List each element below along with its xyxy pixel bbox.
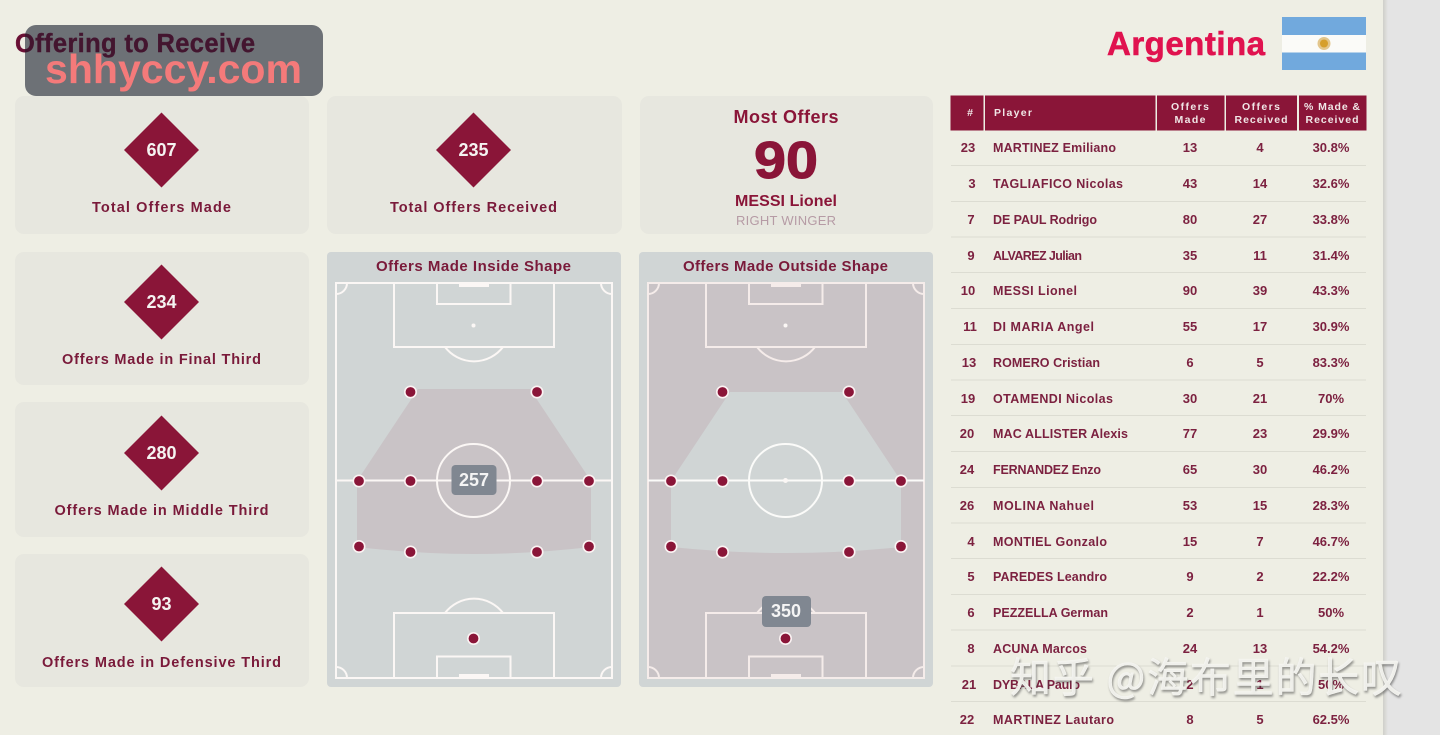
row: PEZZELLA German: 2 [1186, 605, 1194, 620]
panel: total offers received [327, 96, 622, 234]
icon: diamond 235 [436, 112, 511, 188]
heading: Offers Made Inside Shape [376, 258, 571, 275]
row: PAREDES Leandro: 5 [967, 569, 975, 584]
icon: diamond 93: 93 [151, 594, 172, 614]
row: MAC ALLISTER Alexis: MAC ALLISTER Alexis [993, 427, 1128, 441]
panel: most offers [640, 96, 933, 234]
row: PEZZELLA German: PEZZELLA German [993, 606, 1108, 620]
row: MESSI Lionel: MESSI Lionel [993, 284, 1077, 298]
label: Offers Made in Defensive Third [42, 655, 281, 671]
icon: diamond 234: 234 [146, 292, 177, 312]
row: PEZZELLA German: 6 [967, 605, 975, 620]
row: ROMERO Cristian: 83.3% [1313, 355, 1350, 370]
row: DYBALA Paulo: 21 [962, 677, 976, 692]
row: MONTIEL Gonzalo: 4 [967, 534, 975, 549]
row: ACUNA Marcos: 24 [1183, 641, 1198, 656]
value badge 257 [452, 465, 496, 495]
panel: middle third [15, 402, 309, 537]
player dots [353, 386, 595, 644]
shaded outside area [648, 283, 924, 678]
row: MARTINEZ Emiliano [961, 140, 1350, 155]
row: MARTINEZ Emiliano: 13 [1183, 140, 1197, 155]
watermark box: shhyccy.com: shhyccy.com [45, 46, 302, 92]
row: MOLINA Nahuel: 53 [1183, 498, 1197, 513]
row: MESSI Lionel [961, 283, 1350, 298]
icon: diamond 234 [124, 264, 199, 340]
team name: Argentina [1107, 25, 1266, 62]
row: PEZZELLA German [967, 605, 1344, 620]
row: DI MARIA Angel: 55 [1183, 319, 1197, 334]
watermark: zhihu: 知乎 @海布里的长叹 [1010, 644, 1402, 704]
table header: # [967, 107, 973, 119]
row: PAREDES Leandro: 9 [1186, 569, 1194, 584]
row: DYBALA Paulo: 1 [1256, 677, 1264, 692]
row: TAGLIAFICO Nicolas: TAGLIAFICO Nicolas [993, 177, 1123, 191]
row: OTAMENDI Nicolas: 70% [1318, 391, 1344, 406]
row: ALVAREZ Julian: ALVAREZ Julian [993, 249, 1082, 263]
panel: final third [15, 252, 309, 385]
row: FERNANDEZ Enzo: 30 [1253, 462, 1267, 477]
row: FERNANDEZ Enzo: 24 [960, 462, 975, 477]
row: DE PAUL Rodrigo: 27 [1253, 212, 1267, 227]
shaded inside shape [357, 389, 591, 554]
row: DE PAUL Rodrigo: DE PAUL Rodrigo [993, 213, 1097, 227]
watermark box: shhyccy.com [25, 25, 323, 96]
row: ACUNA Marcos: 8 [967, 641, 975, 656]
row: ALVAREZ Julian: 35 [1183, 248, 1197, 263]
table header: Made [1174, 114, 1206, 126]
row: MARTINEZ Lautaro: 8 [1186, 712, 1194, 727]
row: DYBALA Paulo: 50% [1318, 677, 1344, 692]
value badge 257: 257 [459, 470, 489, 490]
row: DYBALA Paulo: DYBALA Paulo [993, 678, 1080, 692]
row: MARTINEZ Lautaro: 5 [1256, 712, 1264, 727]
table header: Offers [1242, 101, 1280, 113]
heading: Offers Made Outside Shape [683, 258, 888, 275]
row: DI MARIA Angel: 30.9% [1313, 319, 1350, 334]
row: MESSI Lionel: 90 [1183, 283, 1197, 298]
row: OTAMENDI Nicolas: OTAMENDI Nicolas [993, 392, 1113, 406]
row: TAGLIAFICO Nicolas: 3 [968, 176, 976, 191]
row: FERNANDEZ Enzo: 65 [1183, 462, 1197, 477]
table header: % Made & [1304, 101, 1360, 113]
row: FERNANDEZ Enzo [960, 462, 1350, 477]
row: MAC ALLISTER Alexis: 20 [960, 426, 974, 441]
row: MONTIEL Gonzalo: 46.7% [1313, 534, 1350, 549]
table: player offers [950, 96, 1366, 727]
table header [950, 96, 1366, 130]
table header: Received [1234, 114, 1288, 126]
row: OTAMENDI Nicolas [961, 391, 1344, 406]
label: Total Offers Made [92, 200, 231, 216]
row: MAC ALLISTER Alexis: 23 [1253, 426, 1267, 441]
row: ACUNA Marcos: 54.2% [1313, 641, 1350, 656]
row: DE PAUL Rodrigo [967, 212, 1350, 227]
row: MESSI Lionel: 43.3% [1313, 283, 1350, 298]
row: MOLINA Nahuel: MOLINA Nahuel [993, 499, 1094, 513]
row: ROMERO Cristian: 13 [962, 355, 976, 370]
row: OTAMENDI Nicolas: 21 [1253, 391, 1267, 406]
title: Offering to Receive [15, 30, 255, 58]
row: FERNANDEZ Enzo: 46.2% [1313, 462, 1350, 477]
row: OTAMENDI Nicolas: 19 [961, 391, 975, 406]
position: RIGHT WINGER [736, 213, 836, 228]
icon: diamond 93 [124, 566, 199, 642]
row: ACUNA Marcos: 13 [1253, 641, 1267, 656]
row: ALVAREZ Julian: 11 [1253, 248, 1267, 263]
panel: offers made inside shape [327, 252, 621, 687]
row: MESSI Lionel: 10 [961, 283, 975, 298]
row: PAREDES Leandro: PAREDES Leandro [993, 570, 1107, 584]
row: TAGLIAFICO Nicolas: 32.6% [1313, 176, 1350, 191]
row: ROMERO Cristian: ROMERO Cristian [993, 356, 1100, 370]
row: MONTIEL Gonzalo: 7 [1256, 534, 1264, 549]
row: MARTINEZ Emiliano: 23 [961, 140, 975, 155]
inside shape cut-out [671, 392, 901, 553]
panel: defensive third [15, 554, 309, 687]
row: PAREDES Leandro [967, 569, 1350, 584]
label: Offers Made in Middle Third [54, 503, 268, 519]
player dots [665, 386, 907, 644]
heading: Most Offers [734, 107, 838, 127]
row: MARTINEZ Lautaro [960, 712, 1350, 727]
row: MARTINEZ Lautaro: 22 [960, 712, 974, 727]
row: MARTINEZ Emiliano: MARTINEZ Emiliano [993, 141, 1116, 155]
icon: diamond 607 [124, 112, 199, 188]
row: DE PAUL Rodrigo: 80 [1183, 212, 1197, 227]
big number: 90 [754, 132, 818, 190]
row: MARTINEZ Lautaro: MARTINEZ Lautaro [993, 713, 1114, 727]
row: MONTIEL Gonzalo [967, 534, 1350, 549]
table header: Offers [1171, 101, 1209, 113]
label: Total Offers Received [390, 200, 557, 216]
icon: Argentina flag [1282, 17, 1366, 70]
row: MAC ALLISTER Alexis: 77 [1183, 426, 1197, 441]
row: DI MARIA Angel: 11 [963, 319, 977, 334]
row: ROMERO Cristian: 5 [1256, 355, 1264, 370]
row: MARTINEZ Emiliano: 30.8% [1313, 140, 1350, 155]
value badge 350 [762, 596, 811, 627]
row: PAREDES Leandro: 2 [1256, 569, 1264, 584]
row: MOLINA Nahuel [960, 498, 1350, 513]
icon: diamond 280 [124, 416, 199, 490]
row: PEZZELLA German: 1 [1256, 605, 1264, 620]
row: DYBALA Paulo [962, 677, 1344, 692]
row: PEZZELLA German: 50% [1318, 605, 1344, 620]
row: MONTIEL Gonzalo: MONTIEL Gonzalo [993, 535, 1107, 549]
pitch lines [336, 283, 612, 678]
row: TAGLIAFICO Nicolas: 14 [1253, 176, 1268, 191]
row: FERNANDEZ Enzo: FERNANDEZ Enzo [993, 463, 1101, 477]
table header: Received [1306, 114, 1358, 126]
panel: total offers made [15, 96, 309, 234]
value badge 350: 350 [771, 601, 801, 621]
row: ROMERO Cristian: 6 [1186, 355, 1194, 370]
row: DE PAUL Rodrigo: 33.8% [1313, 212, 1350, 227]
row: ALVAREZ Julian: 9 [967, 248, 975, 263]
player name: MESSI Lionel [735, 193, 837, 210]
row: MONTIEL Gonzalo: 15 [1183, 534, 1197, 549]
row: DE PAUL Rodrigo: 7 [967, 212, 975, 227]
row: DI MARIA Angel [963, 319, 1350, 334]
row: MOLINA Nahuel: 26 [960, 498, 974, 513]
pitch lines [648, 283, 924, 678]
row: ALVAREZ Julian: 31.4% [1313, 248, 1350, 263]
row: TAGLIAFICO Nicolas: 43 [1183, 176, 1197, 191]
label: Offers Made in Final Third [62, 352, 261, 368]
row: TAGLIAFICO Nicolas [968, 176, 1350, 191]
row: MARTINEZ Emiliano: 4 [1256, 140, 1264, 155]
row: MESSI Lionel: 39 [1253, 283, 1267, 298]
row: MARTINEZ Lautaro: 62.5% [1313, 712, 1350, 727]
row: MAC ALLISTER Alexis [960, 426, 1350, 441]
row: ACUNA Marcos [967, 641, 1350, 656]
row: ROMERO Cristian [962, 355, 1350, 370]
row: DI MARIA Angel: 17 [1253, 319, 1267, 334]
row: MOLINA Nahuel: 15 [1253, 498, 1267, 513]
row: MAC ALLISTER Alexis: 29.9% [1313, 426, 1350, 441]
row: ALVAREZ Julian [967, 248, 1350, 263]
icon: diamond 607: 607 [146, 140, 177, 160]
panel: offers made outside shape [639, 252, 933, 687]
row: DYBALA Paulo: 2 [1186, 677, 1194, 692]
table header: Player [994, 107, 1032, 119]
row: ACUNA Marcos: ACUNA Marcos [993, 642, 1087, 656]
row: PAREDES Leandro: 22.2% [1313, 569, 1350, 584]
icon: diamond 235: 235 [458, 140, 489, 160]
row: MOLINA Nahuel: 28.3% [1313, 498, 1350, 513]
row: OTAMENDI Nicolas: 30 [1183, 391, 1197, 406]
row: DI MARIA Angel: DI MARIA Angel [993, 320, 1094, 334]
icon: diamond 280: 280 [146, 443, 177, 463]
